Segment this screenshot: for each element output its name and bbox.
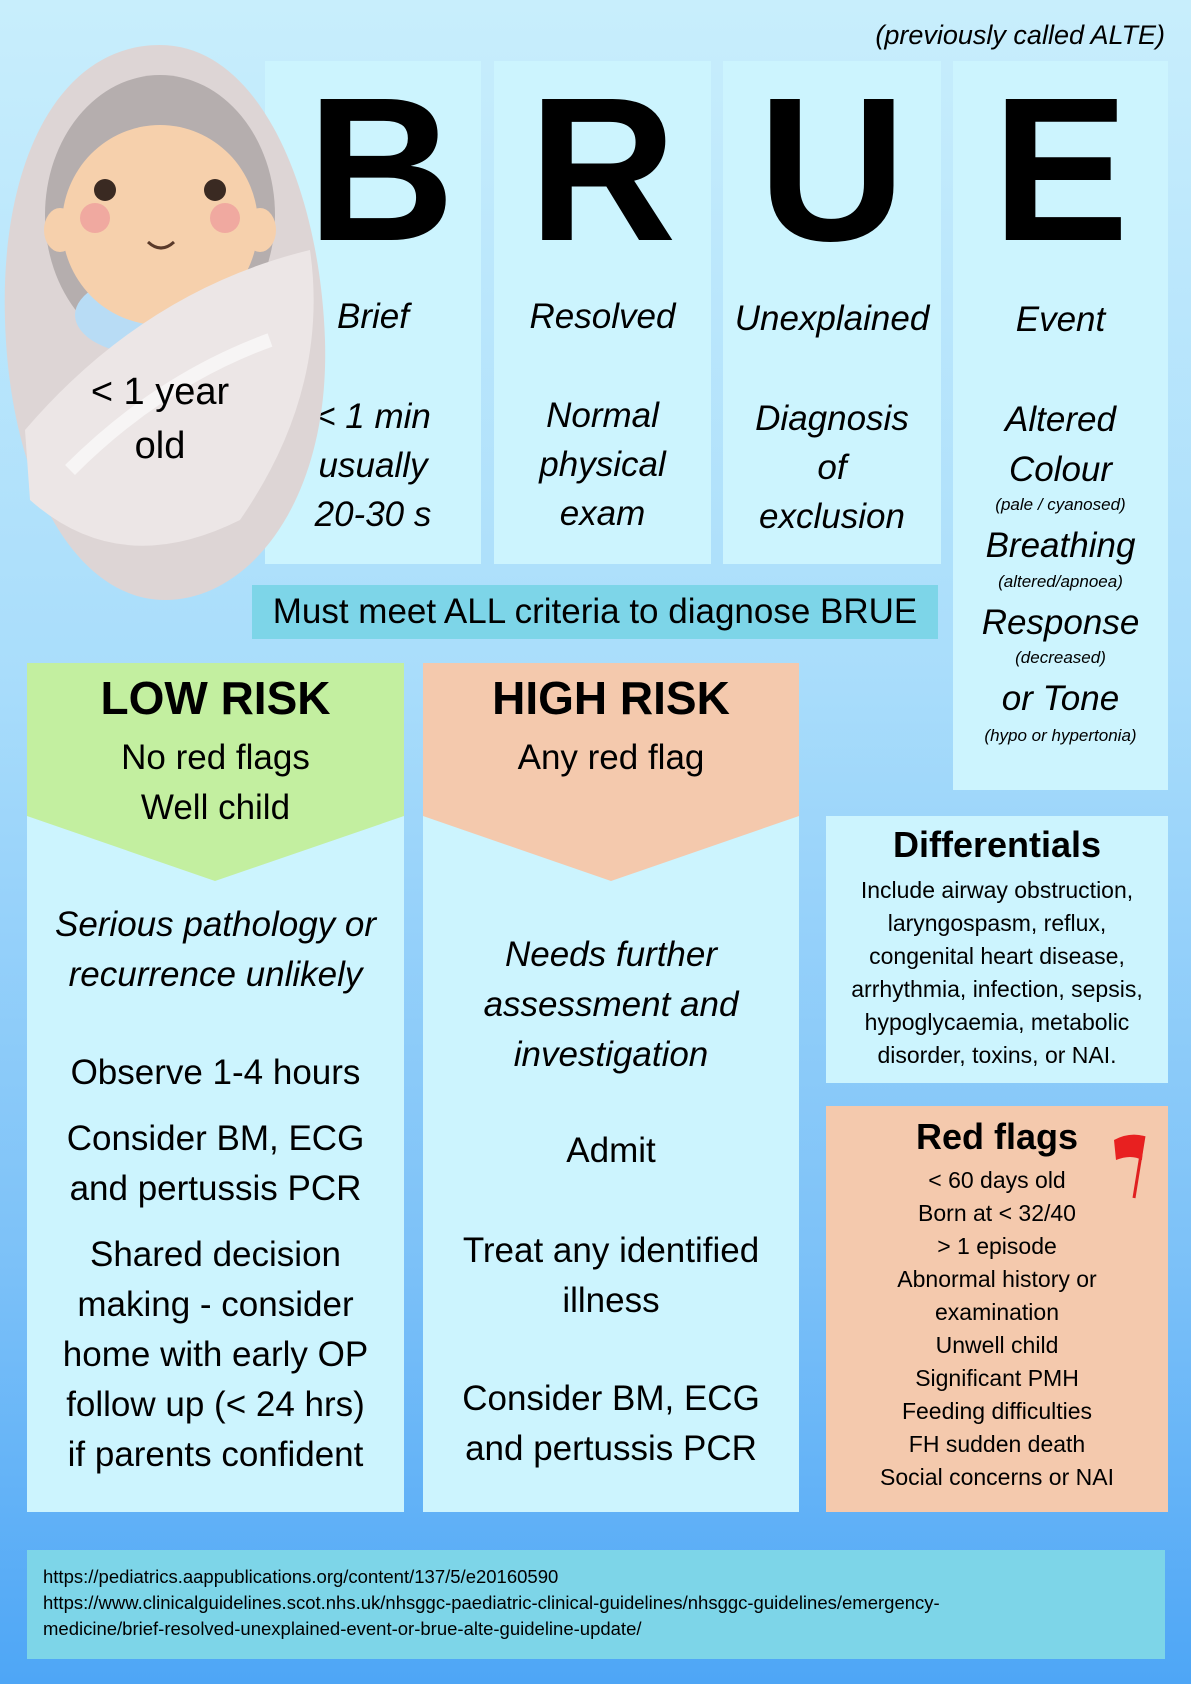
panel: red flags: Social concerns or NAI <box>880 1464 1114 1490</box>
panel: high risk: and pertussis PCR <box>465 1429 757 1468</box>
panel: E Event: (altered/apnoea) <box>998 572 1123 591</box>
panel: red flags: examination <box>935 1299 1059 1325</box>
illustration: swaddled baby <box>4 45 326 600</box>
panel: R Resolved: R <box>528 55 677 284</box>
panel: differentials: disorder, toxins, or NAI. <box>877 1042 1117 1068</box>
panel: low risk: LOW RISK <box>100 672 330 724</box>
panel: E Event: Colour <box>1009 450 1112 489</box>
text: high risk guidance: assessment and <box>484 985 738 1024</box>
panel: high risk: Any red flag <box>518 738 704 777</box>
panel: B Brief: 20-30 s <box>315 495 431 534</box>
header: low risk <box>27 663 404 881</box>
text: under 1 year old: old <box>135 425 185 467</box>
header: high risk <box>423 663 799 881</box>
note: previously called ALTE: (previously called ALTE) <box>875 20 1165 50</box>
panel: U Unexplained <box>723 61 941 564</box>
text: low risk guidance <box>55 905 378 994</box>
panel: low risk: if parents confident <box>68 1435 363 1474</box>
panel: E Event: Event <box>1016 300 1105 339</box>
panel: R Resolved: physical <box>539 445 666 484</box>
footer: references: https://pediatrics.aappublications.org/content/137/5/e20160590 <box>43 1566 558 1587</box>
panel: low risk: Consider BM, ECG <box>67 1119 364 1158</box>
panel: R Resolved: Normal <box>546 396 659 435</box>
panel: B Brief: B <box>307 55 455 284</box>
footer: references <box>27 1550 1165 1659</box>
panel: red flags <box>826 1106 1168 1512</box>
banner: must meet all criteria <box>252 585 938 639</box>
text: high risk guidance: investigation <box>514 1035 708 1074</box>
panel: R Resolved: Resolved <box>530 297 675 336</box>
panel: B Brief: < 1 min <box>315 397 431 436</box>
banner: must meet all criteria: Must meet ALL criteria to diagnose BRUE <box>273 592 917 631</box>
panel: differentials <box>826 816 1168 1083</box>
panel: high risk: HIGH RISK <box>492 672 730 724</box>
panel: differentials: laryngospasm, reflux, <box>888 910 1106 936</box>
panel: E Event: Altered <box>1005 400 1116 439</box>
panel: B Brief: usually <box>319 446 427 485</box>
panel: E Event <box>953 61 1168 790</box>
panel: red flags: Unwell child <box>936 1332 1058 1358</box>
panel: red flags: Abnormal history or <box>897 1266 1097 1292</box>
panel: red flags: > 1 episode <box>937 1233 1057 1259</box>
panel: low risk: and pertussis PCR <box>70 1169 361 1208</box>
panel: U Unexplained: Diagnosis <box>755 399 909 438</box>
panel: red flags: Red flags <box>916 1116 1078 1157</box>
panel: E Event: (pale / cyanosed) <box>995 495 1126 514</box>
panel: low risk <box>27 663 404 1512</box>
panel: low risk: Observe 1-4 hours <box>71 1053 360 1092</box>
panel: red flags: Born at < 32/40 <box>918 1200 1076 1226</box>
panel: high risk: Admit <box>566 1131 656 1170</box>
panel: differentials: hypoglycaemia, metabolic <box>865 1009 1129 1035</box>
panel: E Event: E <box>992 55 1129 284</box>
panel: differentials: arrhythmia, infection, sepsis, <box>851 976 1143 1002</box>
panel: red flags: < 60 days old <box>928 1167 1066 1193</box>
icon: red flag <box>1114 1134 1146 1198</box>
panel: high risk <box>423 663 799 1512</box>
text: high risk guidance <box>484 935 740 1074</box>
panel: E Event: Breathing <box>986 526 1135 565</box>
panel: E Event: or Tone <box>1002 679 1119 718</box>
panel: red flags: FH sudden death <box>909 1431 1085 1457</box>
panel: B Brief <box>265 61 481 564</box>
panel: E Event: Response <box>982 603 1139 642</box>
panel: high risk: illness <box>562 1281 660 1320</box>
panel: E Event: (decreased) <box>1015 648 1106 667</box>
panel: R Resolved <box>494 61 711 564</box>
text: under 1 year old: < 1 year <box>91 371 229 413</box>
panel: U Unexplained: exclusion <box>759 497 905 536</box>
footer: references: https://www.clinicalguidelines.scot.nhs.uk/nhsggc-paediatric-clinical-guidelines/nhsggc-guidelines/emergency- <box>43 1592 940 1613</box>
panel: U Unexplained: U <box>758 55 906 284</box>
panel: low risk: Shared decision <box>90 1235 341 1274</box>
panel: high risk: Treat any identified <box>463 1231 759 1270</box>
panel: low risk: making - consider <box>77 1285 354 1324</box>
panel: red flags: Significant PMH <box>915 1365 1079 1391</box>
panel: high risk: Consider BM, ECG <box>462 1379 760 1418</box>
panel: low risk: home with early OP <box>63 1335 368 1374</box>
panel: R Resolved: exam <box>560 494 645 533</box>
text: under 1 year old <box>91 371 229 467</box>
panel: differentials: Include airway obstruction, <box>861 877 1133 903</box>
panel: differentials: congenital heart disease, <box>869 943 1125 969</box>
panel: low risk: follow up (< 24 hrs) <box>66 1385 365 1424</box>
text: low risk guidance: recurrence unlikely <box>69 955 362 994</box>
panel: red flags: Feeding difficulties <box>902 1398 1092 1424</box>
panel: low risk: Well child <box>141 788 290 827</box>
panel: U Unexplained: Unexplained <box>735 299 929 338</box>
panel: B Brief: Brief <box>337 297 409 336</box>
text: high risk guidance: Needs further <box>505 935 717 974</box>
panel: E Event: (hypo or hypertonia) <box>984 726 1137 745</box>
footer: references: medicine/brief-resolved-unexplained-event-or-brue-alte-guideline-update/ <box>43 1618 642 1639</box>
panel: low risk: No red flags <box>121 738 310 777</box>
text: low risk guidance: Serious pathology or <box>55 905 376 944</box>
panel: U Unexplained: of <box>817 448 847 487</box>
panel: differentials: Differentials <box>893 824 1101 865</box>
